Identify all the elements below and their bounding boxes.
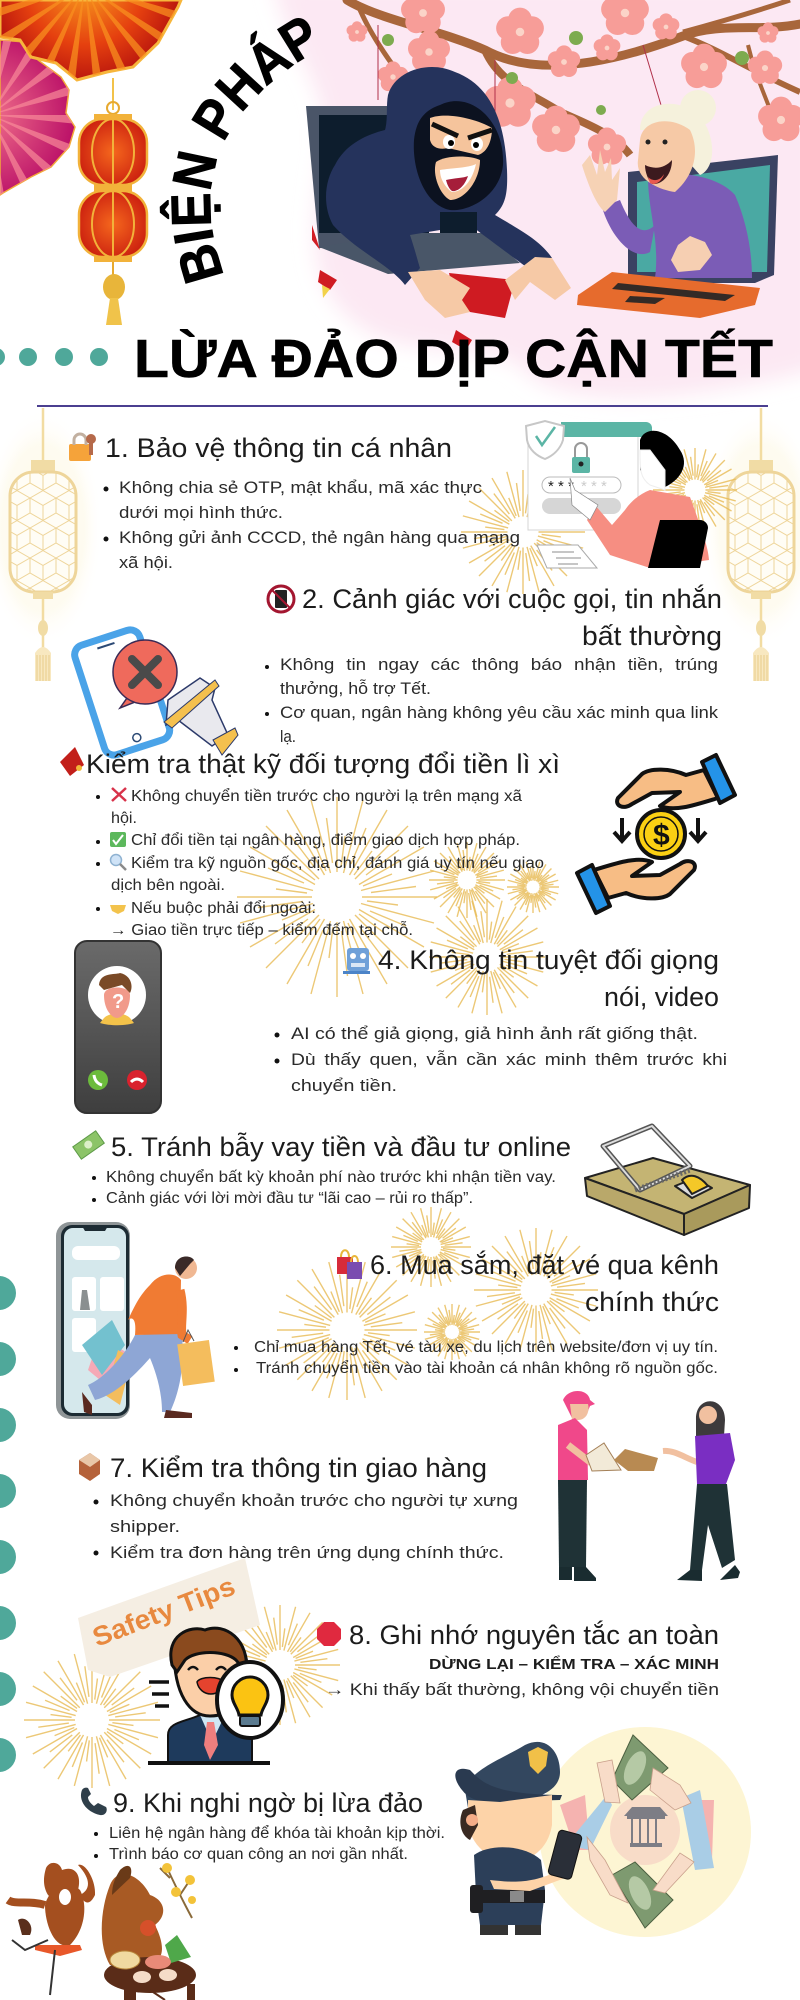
panel: section 3 money exchange bbox=[60, 747, 735, 939]
illustration: mousetrap bbox=[585, 1126, 750, 1235]
text block: bullets 5: Cảnh giác với lời mời đầu tư “lãi cao – rủi ro thấp”. bbox=[106, 1190, 473, 1207]
divider bbox=[37, 405, 768, 407]
text block: bullets 9: Liên hệ ngân hàng để khóa tài khoản kịp thời. bbox=[109, 1825, 445, 1842]
illustration: delivery man and customer bbox=[558, 1391, 740, 1581]
text block: bullets 2: lạ. bbox=[280, 727, 296, 746]
illustration: man running from phone with shopping bags bbox=[56, 1222, 215, 1419]
panel: section 5 loans and investing bbox=[73, 1126, 750, 1235]
icon: no mobile phones bbox=[268, 586, 294, 612]
icon: robot bbox=[343, 948, 370, 974]
heading 6 bbox=[370, 1249, 719, 1317]
illustration: hacker coming out of laptop bbox=[306, 67, 571, 350]
illustration: person entering password: * * * bbox=[581, 478, 607, 495]
panel: section 1 personal information bbox=[69, 421, 709, 572]
curved heading: BIỆN PHÁP: BIỆN PHÁP bbox=[160, 18, 311, 284]
illustration: safety tips paper label bbox=[78, 1558, 260, 1677]
title: LỪA ĐẢO DỊP CẬN TẾT bbox=[134, 328, 773, 389]
icon: lock and key bbox=[69, 434, 96, 461]
illustration: police officer with money and bank bbox=[455, 1727, 751, 1937]
panel: section 7 delivery bbox=[79, 1391, 740, 1581]
text block: bullets 1: xã hội. bbox=[119, 553, 173, 572]
text block: principle: DỪNG LẠI – KIỂM TRA – XÁC MINH bbox=[429, 1655, 719, 1673]
text block: bullets 1 bbox=[104, 478, 520, 572]
text block: bullets 9: Trình báo cơ quan công an nơi gần nhất. bbox=[109, 1846, 408, 1863]
fireworks bbox=[24, 448, 737, 1788]
hanging lantern left bbox=[0, 408, 103, 681]
illustration: phone with cross and hand with pen bbox=[72, 627, 238, 758]
title dots bbox=[0, 348, 108, 366]
text block: bullets 2: Không tin ngay các thông báo nhận tiền, trúng bbox=[280, 655, 718, 674]
text block: bullets 2: thưởng, hỗ trợ Tết. bbox=[280, 679, 431, 698]
text block: bullets 4 bbox=[274, 1024, 727, 1095]
text block: principle: → Khi thấy bất thường, không vội chuyển tiền bbox=[325, 1680, 719, 1699]
text block: bullets 3: Kiểm tra kỹ nguồn gốc, địa chỉ, đánh giá uy tín nếu giao bbox=[131, 855, 544, 872]
text block: bullets 7 bbox=[94, 1491, 518, 1562]
heading 2: bất thường bbox=[582, 621, 722, 651]
text block: bullets 5: Không chuyển bất kỳ khoản phí nào trước khi nhận tiền vay. bbox=[106, 1169, 556, 1186]
text block: bullets 6: Chỉ mua hàng Tết, vé tàu xe, du lịch trên website/đơn vị uy tín. bbox=[254, 1339, 718, 1356]
illustration: person entering password: * * * bbox=[548, 478, 574, 495]
heading 2: 2. Cảnh giác với cuộc gọi, tin nhắn bbox=[302, 583, 722, 614]
text block: bullets 1: Không gửi ảnh CCCD, thẻ ngân hàng qua mạng bbox=[119, 528, 520, 547]
illustration: horses celebrating Tet bbox=[8, 1863, 196, 2000]
text block: bullets 1: dưới mọi hình thức. bbox=[119, 503, 283, 522]
heading 8: 8. Ghi nhớ nguyên tắc an toàn bbox=[349, 1619, 719, 1650]
text block: bullets 6: Tránh chuyển tiền vào tài khoản cá nhân không rõ nguồn gốc. bbox=[256, 1360, 718, 1377]
text block: bullets 2 bbox=[265, 655, 719, 746]
text block: bullets 9 bbox=[94, 1825, 445, 1863]
text block: bullets 1: Không chia sẻ OTP, mật khẩu, mã xác thực bbox=[119, 478, 483, 497]
illustration: phone unknown caller bbox=[75, 941, 161, 1113]
text block: bullets 4: Dù thấy quen, vẫn cần xác minh thêm trước khi bbox=[291, 1050, 727, 1069]
illustration: man with light bulb bbox=[148, 1628, 283, 1763]
red lanterns bbox=[79, 78, 147, 325]
text block: bullets 3: Nếu buộc phải đổi ngoài: bbox=[131, 900, 316, 917]
text block: bullets 4: chuyển tiền. bbox=[291, 1076, 397, 1095]
decorative teal half circles bbox=[0, 1276, 16, 1772]
illustration: person entering password bbox=[526, 421, 709, 568]
text block: bullets 6 bbox=[234, 1339, 718, 1377]
text block: bullets 3: Chỉ đổi tiền tại ngân hàng, điểm giao dịch hợp pháp. bbox=[131, 832, 520, 849]
icon: stop sign bbox=[317, 1622, 341, 1646]
text block: bullets 2: Cơ quan, ngân hàng không yêu cầu xác minh qua link bbox=[280, 703, 719, 722]
heading 4 bbox=[378, 945, 719, 1012]
heading 4: 4. Không tin tuyệt đối giọng bbox=[378, 945, 719, 975]
panel: section 8 safety principle bbox=[78, 1558, 719, 1763]
icon: package bbox=[79, 1453, 100, 1481]
panel: section 4 AI voice and video bbox=[75, 941, 727, 1113]
panel: section 2 suspicious calls bbox=[72, 583, 722, 758]
fan: red bbox=[0, 0, 181, 80]
hanging lantern right bbox=[701, 408, 800, 681]
illustration: hands and coin: $ bbox=[653, 819, 670, 852]
text block: bullets 3 bbox=[96, 788, 544, 939]
plum blossom branch bbox=[346, 0, 800, 180]
heading 4: nói, video bbox=[604, 982, 719, 1012]
icon: red envelope bbox=[60, 747, 84, 776]
heading 1: 1. Bảo vệ thông tin cá nhân bbox=[105, 433, 452, 463]
heading 3: Kiểm tra thật kỹ đối tượng đổi tiền lì xì bbox=[86, 749, 560, 779]
panel: section 9 when suspected bbox=[8, 1727, 751, 2000]
illustration: phone unknown caller: ? bbox=[112, 991, 124, 1013]
icon: shopping bags bbox=[337, 1250, 362, 1279]
panel: section 6 official channels bbox=[56, 1222, 719, 1419]
text block: bullets 4: AI có thể giả giọng, giả hình ảnh rất giống thật. bbox=[291, 1024, 698, 1043]
text block: bullets 7: Kiểm tra đơn hàng trên ứng dụng chính thức. bbox=[110, 1543, 504, 1562]
text block: bullets 3: hội. bbox=[111, 810, 137, 827]
heading 6: chính thức bbox=[585, 1287, 719, 1317]
fan: magenta bbox=[0, 40, 75, 195]
illustration: safety tips paper label: Safety Tips bbox=[88, 1571, 239, 1653]
text block: bullets 7: shipper. bbox=[110, 1517, 180, 1536]
illustration: hands and coin bbox=[577, 755, 735, 913]
header pink background bbox=[272, 0, 800, 398]
text block: bullets 7: Không chuyển khoản trước cho người tự xưng bbox=[110, 1491, 518, 1510]
text block: bullets 5 bbox=[92, 1169, 556, 1207]
heading 2 bbox=[302, 583, 722, 651]
heading 6: 6. Mua sắm, đặt vé qua kênh bbox=[370, 1249, 719, 1280]
icon: money with wings bbox=[73, 1131, 104, 1159]
text block: bullets 3: dịch bên ngoài. bbox=[111, 877, 225, 894]
text block: bullets 3: Không chuyển tiền trước cho người lạ trên mạng xã bbox=[131, 788, 522, 805]
text block: bullets 3: → Giao tiền trực tiếp – kiểm đếm tại chỗ. bbox=[110, 922, 413, 939]
heading 9: 9. Khi nghi ngờ bị lừa đảo bbox=[113, 1788, 423, 1818]
heading 5: 5. Tránh bẫy vay tiền và đầu tư online bbox=[111, 1131, 571, 1162]
text block: principle bbox=[325, 1655, 719, 1699]
heading 7: 7. Kiểm tra thông tin giao hàng bbox=[110, 1453, 487, 1483]
illustration: elderly woman on laptop bbox=[577, 90, 778, 318]
icon: telephone bbox=[81, 1788, 107, 1815]
